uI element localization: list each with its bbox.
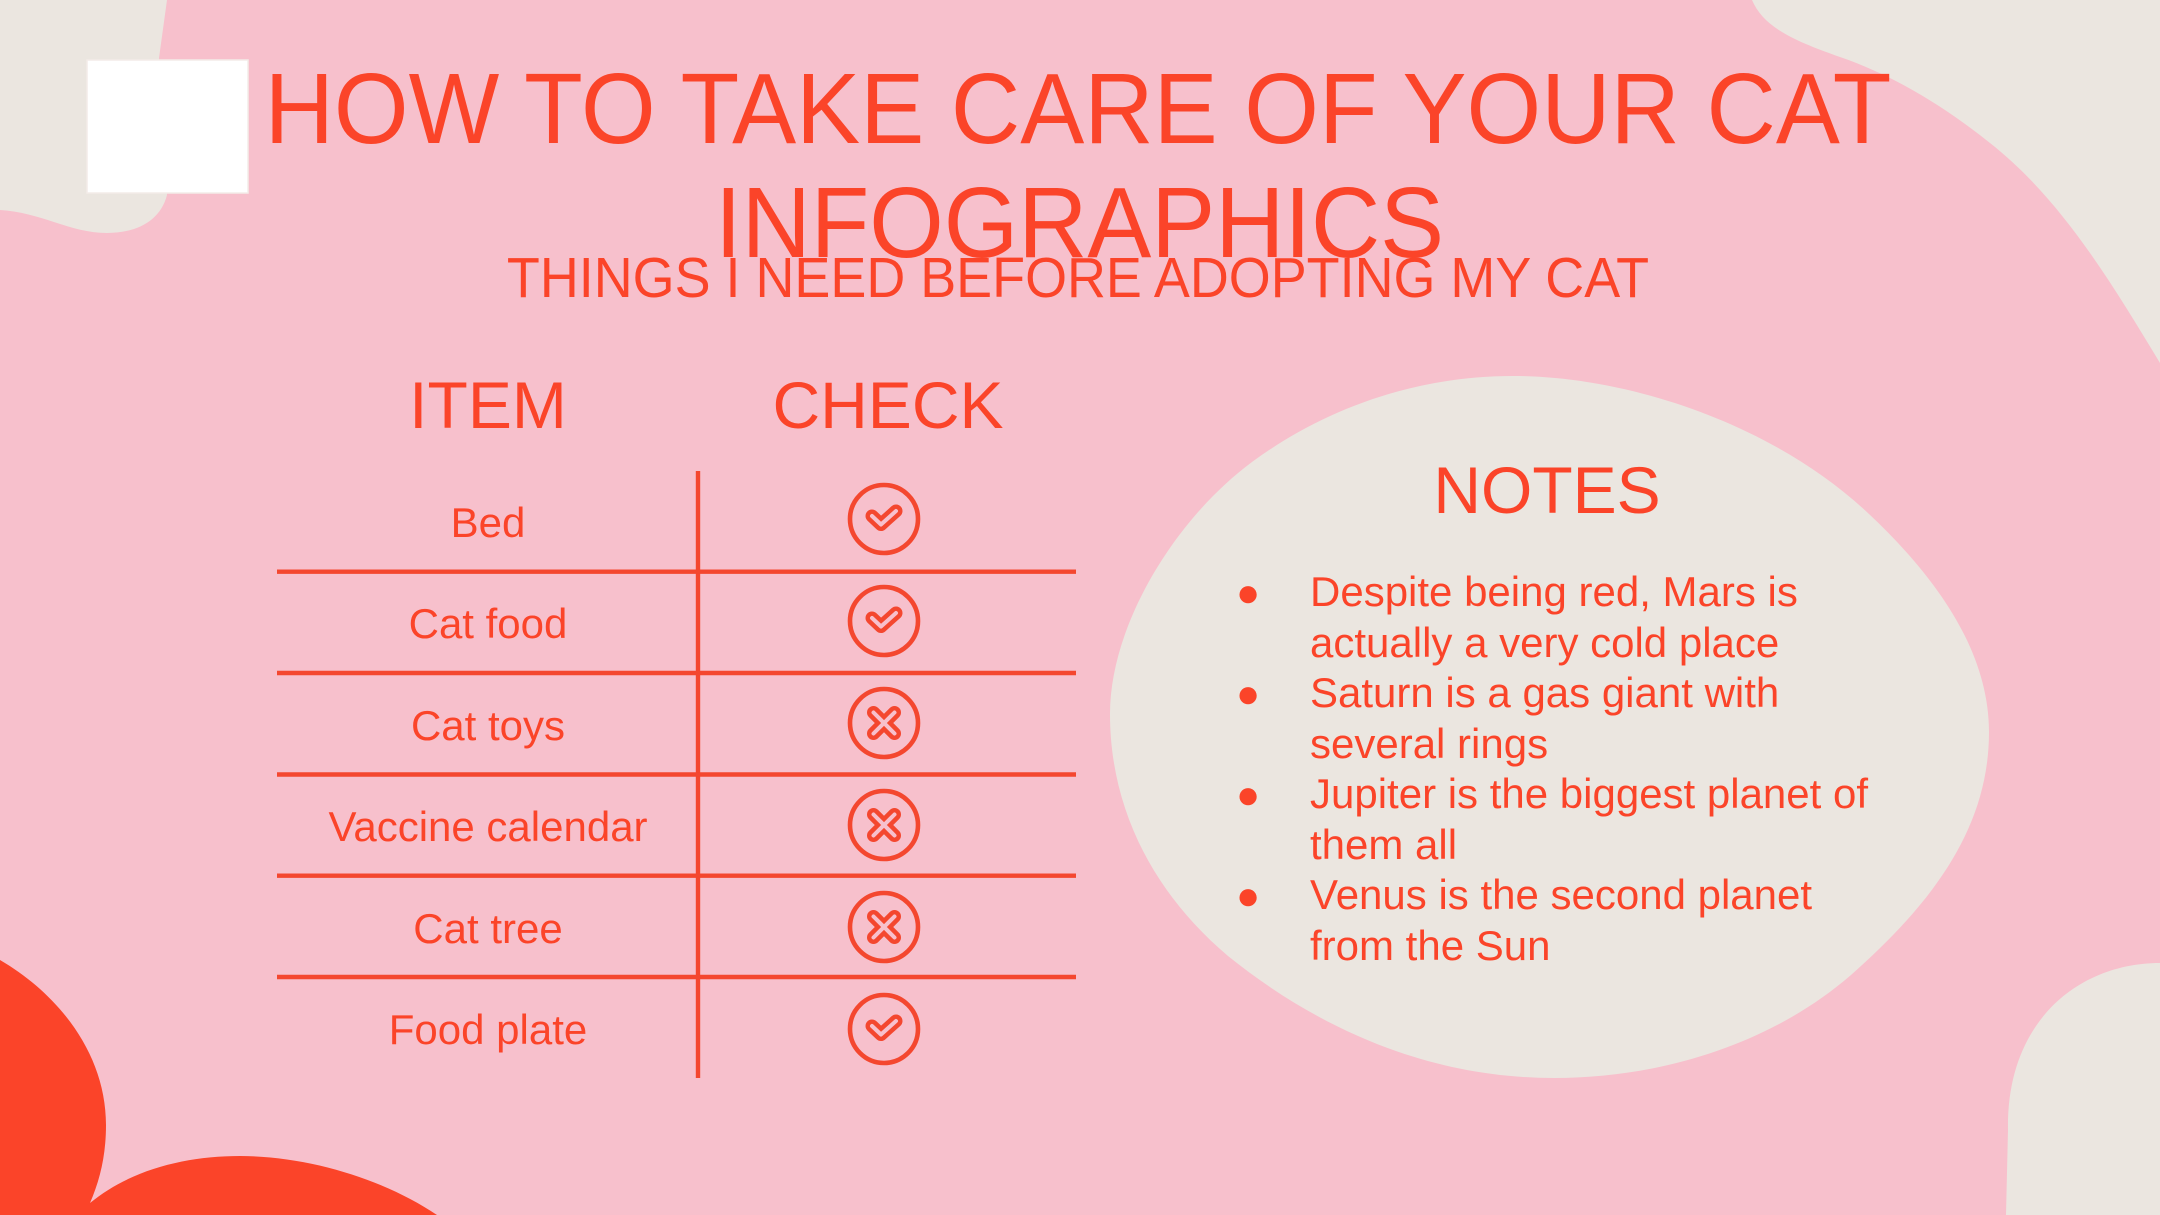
notes list: ●	[1236, 874, 1260, 918]
image placeholder	[87, 60, 248, 193]
icon: check, bed	[850, 485, 918, 553]
table	[277, 368, 1076, 1078]
item labels: Bed	[451, 499, 525, 546]
title	[265, 52, 1891, 278]
title: HOW TO TAKE CARE OF YOUR CAT	[265, 52, 1891, 164]
blob: notes background	[1110, 376, 1989, 1078]
item labels: Cat toys	[411, 702, 565, 749]
notes list: ●	[1236, 773, 1260, 817]
item labels: Vaccine calendar	[328, 803, 648, 850]
blob: bottom right	[2006, 963, 2160, 1215]
notes list: ●	[1236, 571, 1260, 615]
table heading: check: CHECK	[772, 368, 1004, 442]
table heading: item: ITEM	[409, 368, 567, 442]
blob: bottom left orange	[0, 960, 437, 1215]
notes list: several rings	[1310, 720, 1548, 767]
subtitle: THINGS I NEED BEFORE ADOPTING MY CAT	[507, 246, 1649, 309]
table grid lines	[277, 471, 1076, 1078]
notes list: actually a very cold place	[1310, 619, 1779, 666]
notes list: them all	[1310, 821, 1457, 868]
item labels: Food plate	[389, 1006, 587, 1053]
notes list	[1236, 568, 1868, 969]
title: INFOGRAPHICS	[715, 166, 1444, 278]
icon: cross, cat tree	[850, 893, 918, 961]
notes heading: NOTES	[1433, 453, 1661, 527]
item labels: Cat food	[409, 600, 567, 647]
icon: cross, vaccine calendar	[850, 791, 918, 859]
item labels	[328, 499, 648, 1053]
notes list: Despite being red, Mars is	[1310, 568, 1798, 615]
notes list: Jupiter is the biggest planet of	[1310, 770, 1868, 817]
notes list: Venus is the second planet	[1310, 871, 1812, 918]
icon: cross, cat toys	[850, 689, 918, 757]
icon: check, cat food	[850, 587, 918, 655]
icon: check, food plate	[850, 995, 918, 1063]
notes list: from the Sun	[1310, 922, 1550, 969]
blob: top left	[0, 0, 167, 233]
blob: top right	[1752, 0, 2160, 363]
notes list: ●	[1236, 672, 1260, 716]
item labels: Cat tree	[413, 905, 563, 952]
notes list: Saturn is a gas giant with	[1310, 669, 1779, 716]
